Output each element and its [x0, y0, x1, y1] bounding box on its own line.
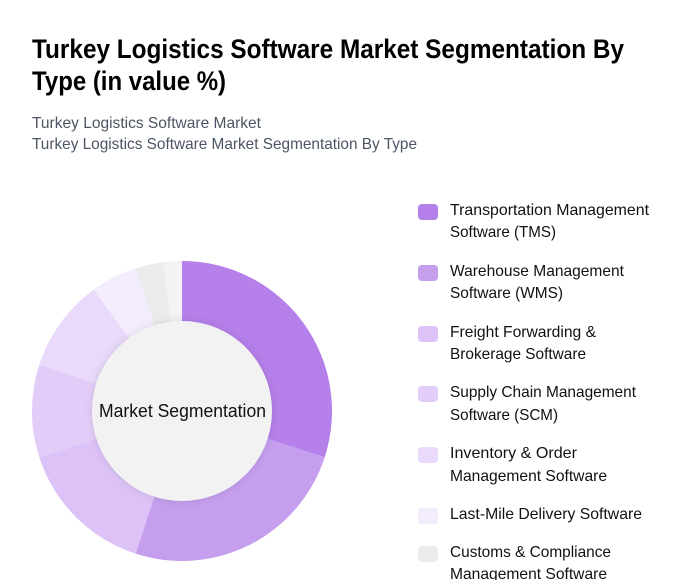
legend item: Transportation Management Software	[418, 202, 650, 241]
subtitle: Turkey Logistics Software Market	[32, 115, 262, 132]
legend item: Customs & Compliance Management Software	[418, 544, 611, 580]
segment: Freight Forwarding & Brokerage Software	[39, 411, 182, 554]
segment: Supply Chain Management Software	[32, 365, 182, 457]
donut centre	[92, 321, 272, 501]
legend item: Freight Forwarding & Brokerage Software	[418, 324, 596, 363]
subtitle: Turkey Logistics Software Market Segmentation By Type	[32, 136, 417, 153]
title: Type (in value %)	[32, 66, 226, 96]
legend	[418, 202, 650, 580]
legend item: Warehouse Management Software: Warehouse Management	[450, 263, 625, 280]
segment: Warehouse Management Software	[136, 411, 325, 561]
legend item: Supply Chain Management Software: Software (SCM)	[450, 407, 558, 424]
donut chart	[32, 261, 332, 561]
legend item: Inventory & Order Management Software: Inventory & Order	[450, 445, 578, 462]
segment: Customs & Compliance Management Software	[136, 262, 182, 411]
subtitle	[32, 115, 417, 153]
segment: Inventory & Order Management Software	[39, 290, 182, 411]
legend item: Transportation Management Software: Transportation Management	[450, 202, 650, 219]
title	[32, 34, 624, 96]
legend item: Transportation Management Software: Software (TMS)	[450, 224, 556, 241]
legend item: Warehouse Management Software: Software (WMS)	[450, 285, 563, 302]
legend item: Supply Chain Management Software: Supply Chain Management	[450, 384, 637, 401]
segment: Other	[163, 261, 182, 411]
centre label: Market Segmentation	[99, 401, 266, 421]
legend item: Customs & Compliance Management Software: Customs & Compliance	[450, 544, 611, 561]
legend item: Inventory & Order Management Software	[418, 445, 607, 485]
legend item: Inventory & Order Management Software: Management Software	[450, 468, 607, 485]
segment: Last-Mile Delivery Software	[94, 268, 182, 411]
legend item: Freight Forwarding & Brokerage Software: Freight Forwarding &	[450, 324, 596, 341]
legend item: Last-Mile Delivery Software: Last-Mile Delivery Software	[450, 506, 642, 523]
title: Turkey Logistics Software Market Segmentation By	[32, 34, 624, 64]
segment: Transportation Management Software	[182, 261, 332, 457]
legend item: Warehouse Management Software	[418, 263, 625, 302]
legend item: Supply Chain Management Software	[418, 384, 637, 424]
legend item: Freight Forwarding & Brokerage Software: Brokerage Software	[450, 346, 586, 363]
